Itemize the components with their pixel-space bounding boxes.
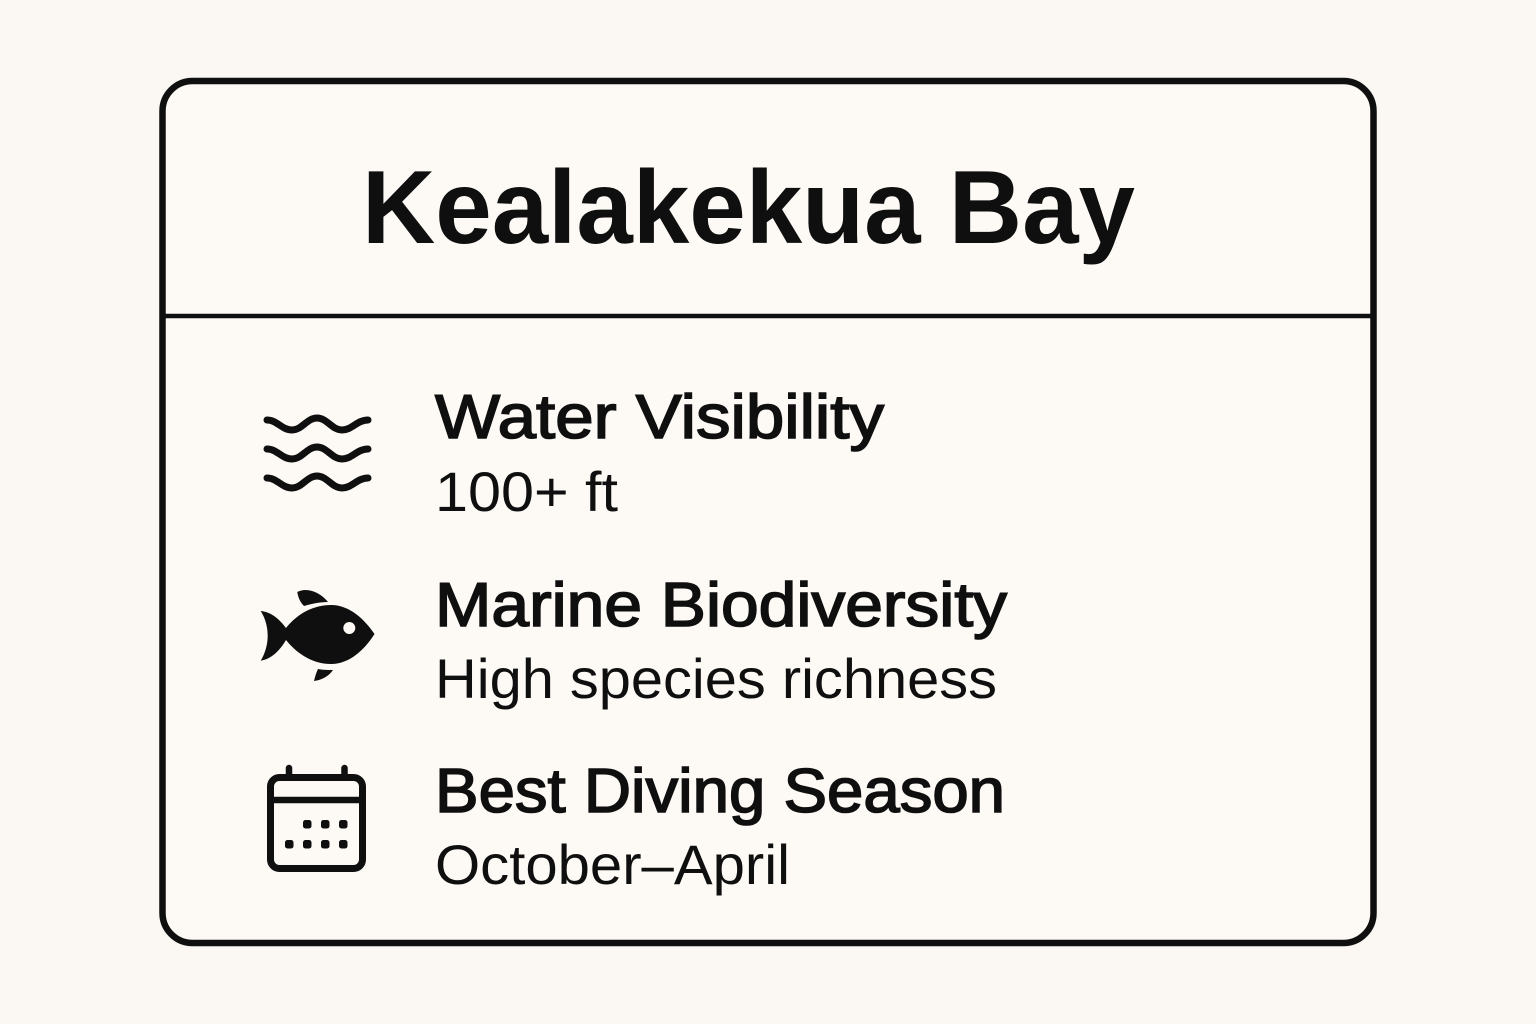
value: best diving season: October–April <box>435 833 790 896</box>
icon: water waves <box>267 418 368 488</box>
icon: calendar <box>270 768 363 868</box>
icon: fish <box>261 590 374 681</box>
panel: info card <box>162 81 1374 943</box>
row: water visibility <box>267 383 884 523</box>
heading: marine biodiversity: Marine Biodiversity <box>435 571 1007 640</box>
row: marine biodiversity <box>261 571 1007 710</box>
row: best diving season <box>270 757 1005 896</box>
heading: water visibility: Water Visibility <box>435 383 884 452</box>
value: marine biodiversity: High species richness <box>435 647 997 710</box>
title: Kealakekua Bay <box>362 150 1135 266</box>
heading: best diving season: Best Diving Season <box>435 757 1005 826</box>
value: water visibility: 100+ ft <box>435 460 618 523</box>
